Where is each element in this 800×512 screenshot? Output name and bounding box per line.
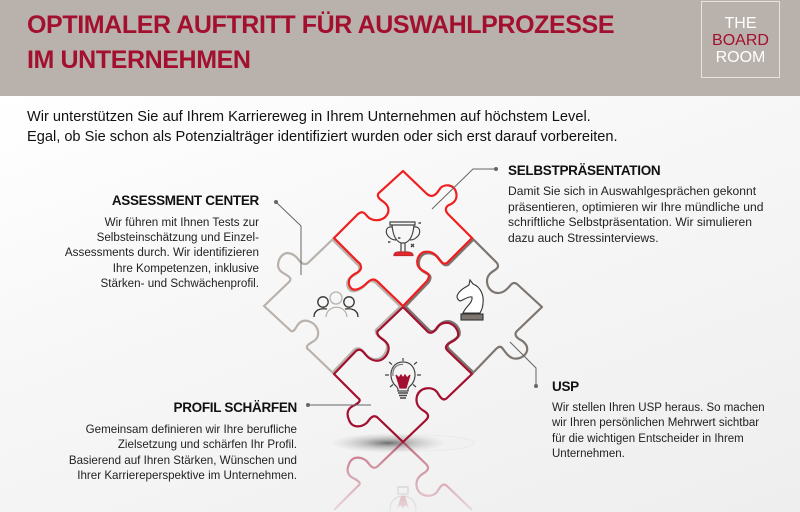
heading: ASSESSMENT CENTER [112, 193, 259, 208]
leader line: usp [510, 342, 538, 388]
body: Wir führen mit Ihnen Tests zur [105, 216, 259, 229]
body: Wir stellen Ihren USP heraus. So machen [552, 402, 765, 414]
body: Ihrer Karriereperspektive im Unternehmen. [77, 469, 297, 482]
body: schriftliche Selbstpräsentation. Wir simulieren [508, 215, 752, 229]
body: Basierend auf Ihren Stärken, Wünschen und [69, 454, 297, 467]
body: Gemeinsam definieren wir Ihre berufliche [86, 423, 297, 436]
title: IM UNTERNEHMEN [27, 46, 251, 74]
logo: ROOM [716, 49, 765, 66]
body: präsentieren, optimieren wir Ihre mündliche und [508, 200, 763, 214]
title: OPTIMALER AUFTRITT FÜR AUSWAHLPROZESSE [27, 11, 614, 39]
heading: USP [552, 379, 579, 394]
icon: light bulb [385, 358, 421, 398]
puzzle graphic [262, 167, 544, 512]
logo: THE [724, 15, 756, 32]
body [508, 184, 763, 245]
body: dazu auch Stressinterviews. [508, 231, 659, 245]
icon: people [314, 292, 358, 317]
intro text: Wir unterstützen Sie auf Ihrem Karriereweg in Ihrem Unternehmen auf höchstem Level. [27, 109, 591, 125]
floor shadow [330, 433, 474, 453]
intro text: Egal, ob Sie schon als Potenzialträger identifiziert wurden oder sich erst darauf vorbereiten. [27, 129, 618, 145]
leader line: selbstpräsentation [432, 167, 498, 209]
body [69, 423, 297, 482]
logo [701, 1, 780, 78]
body: Stärken- und Schwächenprofil. [100, 277, 259, 290]
reflection [334, 442, 472, 512]
body: Damit Sie sich in Auswahlgesprächen gekonnt [508, 184, 756, 198]
beige edge shadows [333, 239, 402, 373]
leader line: assessment center [274, 200, 301, 275]
text block: usp [552, 379, 765, 460]
heading: SELBSTPRÄSENTATION [508, 163, 660, 178]
body [64, 216, 259, 290]
puzzle piece: profil schärfen (bottom, crimson) [334, 307, 472, 442]
logo: BOARD [712, 32, 769, 49]
icon: chess knight [457, 280, 483, 320]
text block: profil schärfen [69, 400, 297, 482]
body: Unternehmen. [552, 448, 625, 460]
body: Selbsteinschätzung und Einzel- [97, 231, 259, 244]
body [552, 402, 765, 460]
title [27, 11, 614, 74]
text block: assessment center [64, 193, 259, 290]
puzzle piece: assessment center (left, beige) [264, 238, 334, 374]
body: für die wichtigen Entscheider in Ihrem [552, 433, 744, 445]
body: wir Ihren persönlichen Mehrwert sichtbar [552, 417, 759, 429]
header band [0, 0, 800, 96]
leader line: profil schärfen [306, 403, 371, 407]
body: Assessments durch. Wir identifizieren [65, 246, 259, 259]
intro text [27, 109, 618, 145]
grey edge shadows [404, 239, 473, 373]
icon: trophy [386, 222, 421, 256]
puzzle piece: USP (right, grey) [472, 238, 542, 374]
puzzle piece: selbstpräsentation (top, red) [334, 171, 472, 306]
heading: PROFIL SCHÄRFEN [173, 400, 297, 415]
text block: selbstpräsentation [508, 163, 763, 245]
body: Ihre Kompetenzen, inklusive [113, 262, 259, 275]
body: Zielsetzung und schärfen Ihr Profil. [118, 438, 297, 451]
